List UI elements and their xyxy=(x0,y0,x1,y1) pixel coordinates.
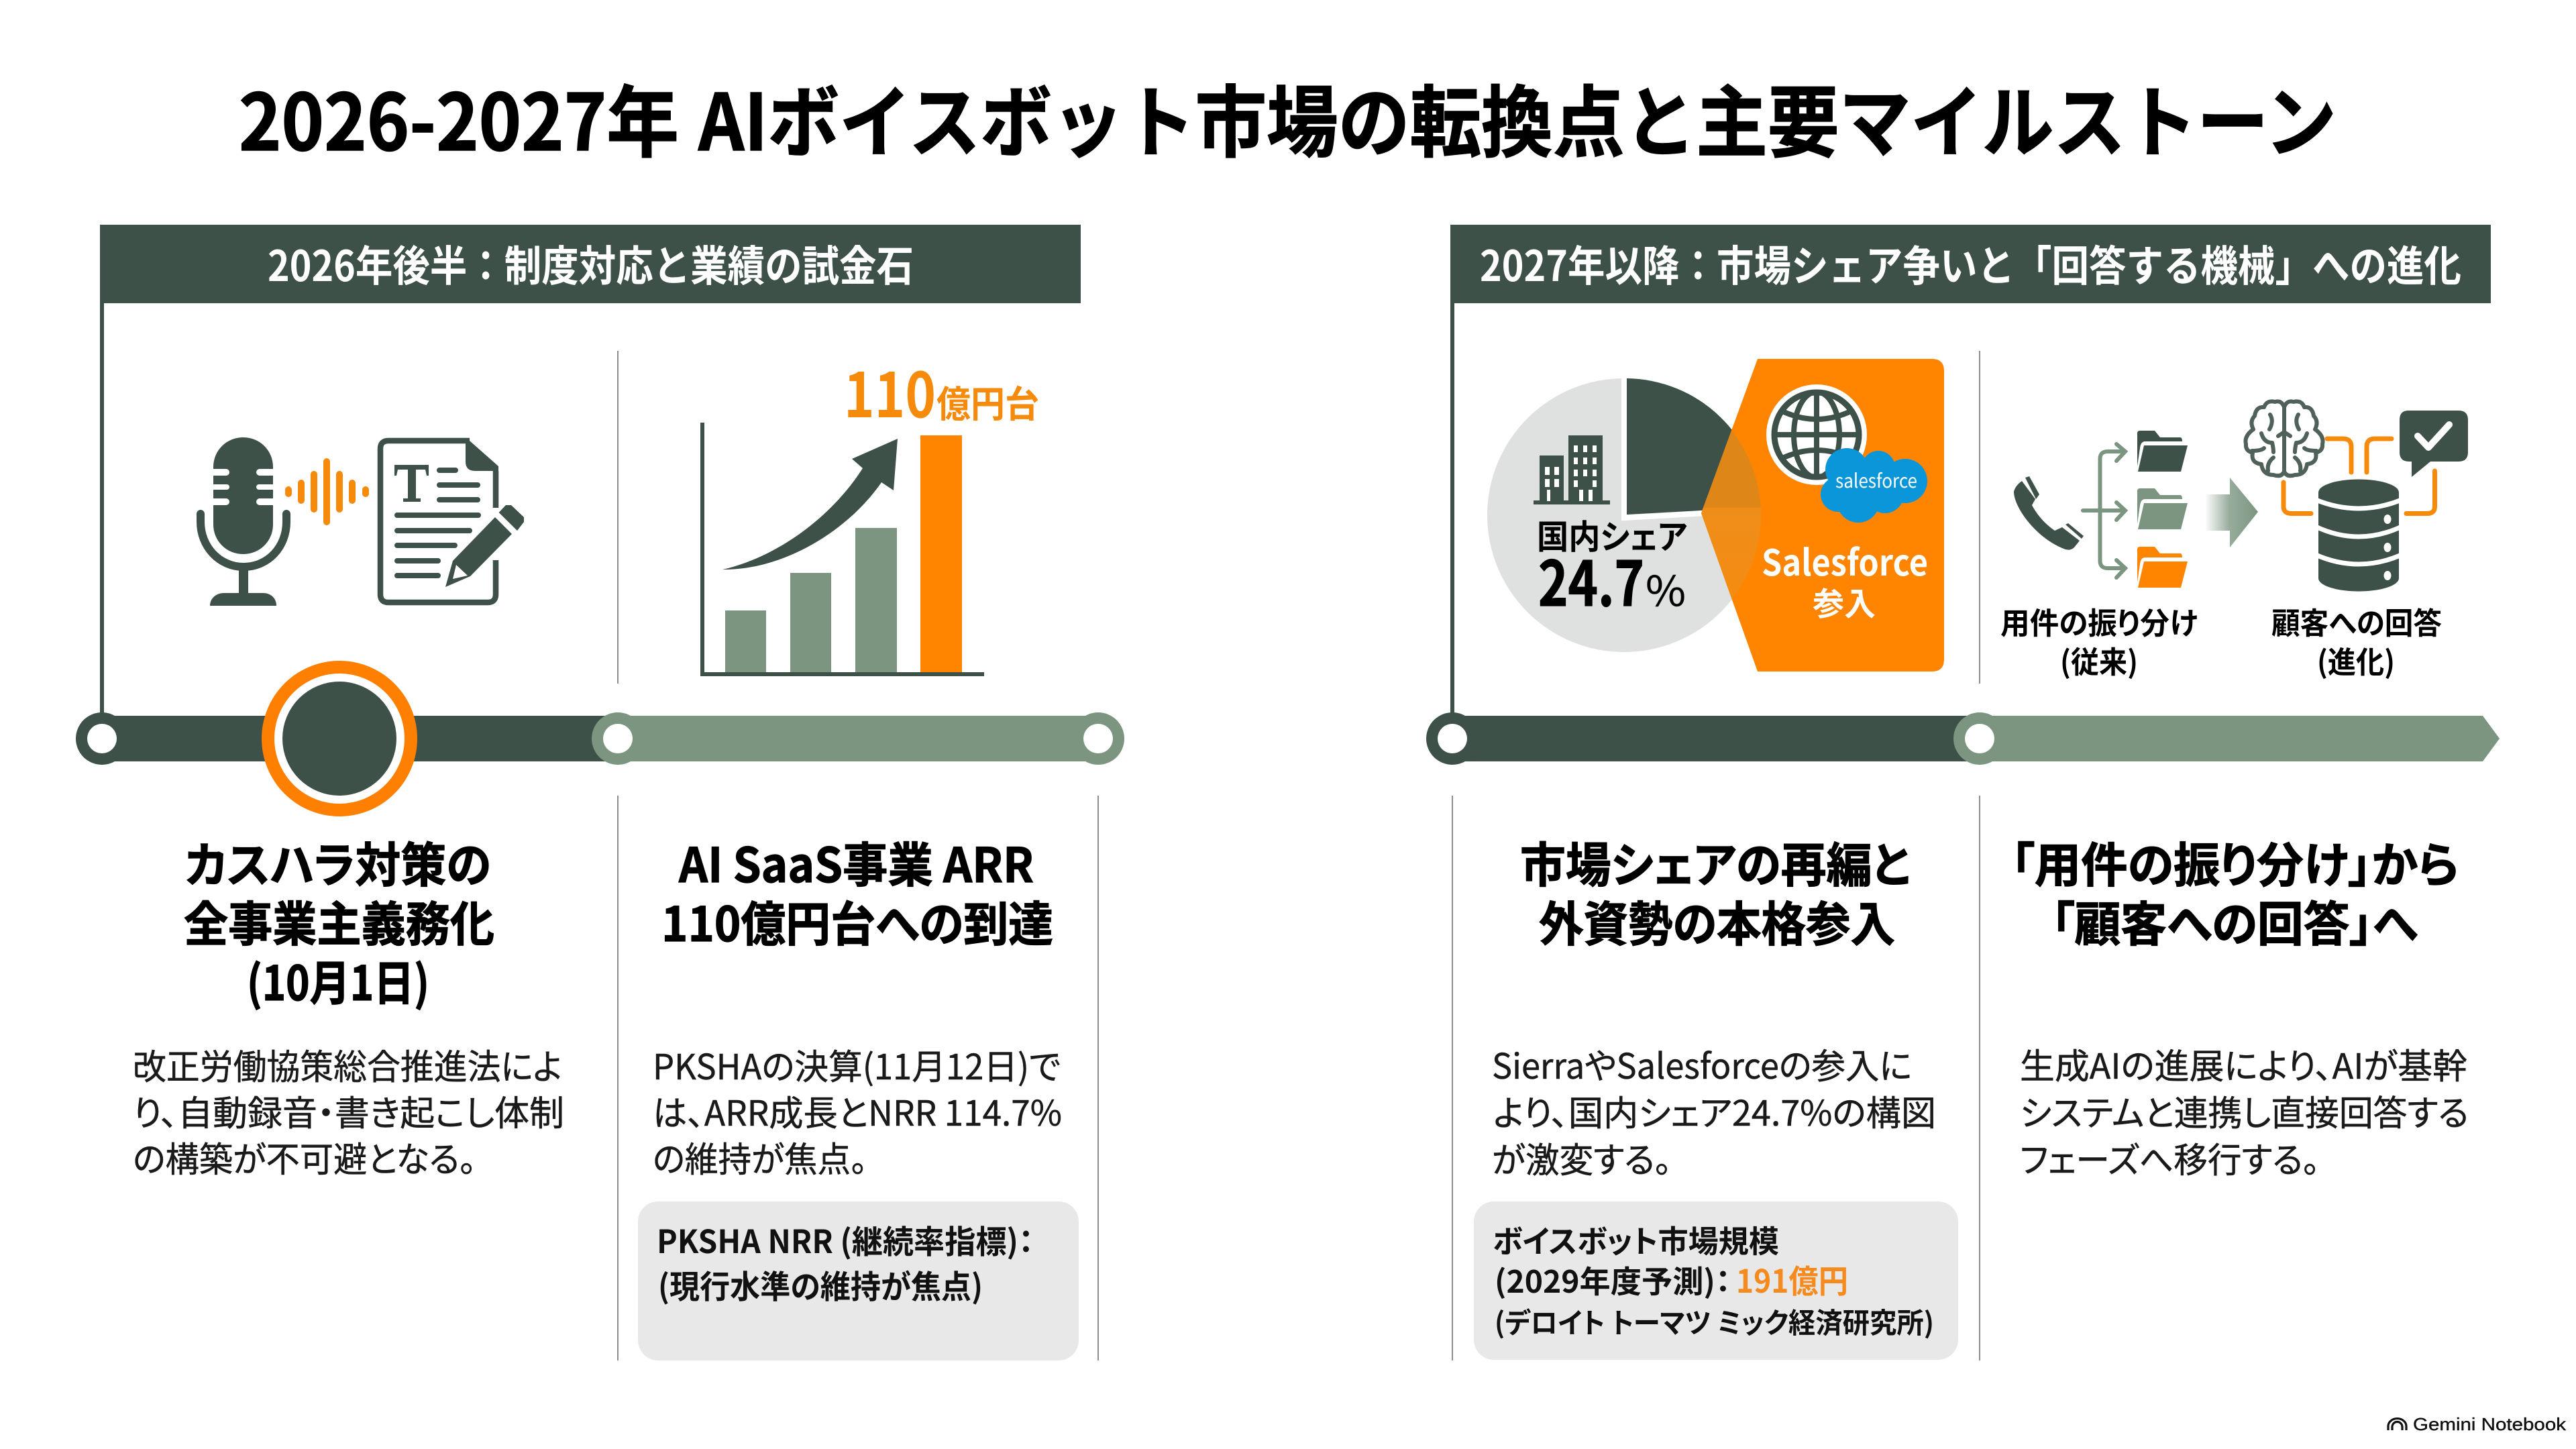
icon: microphone xyxy=(201,437,286,606)
body text: り、自動録音・書き起こし体制 xyxy=(133,1085,564,1136)
diagram: call routing (conventional) xyxy=(2000,431,2198,682)
callout: market size: (デロイト トーマツ ミック経済研究所) xyxy=(1495,1301,1934,1342)
routing label xyxy=(2000,599,2198,682)
milestone text: ARR xyxy=(638,828,1079,1360)
body text: フェーズへ移行する。 xyxy=(2020,1132,2320,1183)
heading: 「顧客への回答」へ xyxy=(2051,887,2418,955)
routing label: (従来) xyxy=(2060,638,2138,682)
panel: 2027 onward xyxy=(1426,225,2500,1360)
heading xyxy=(2011,828,2459,955)
body text: PKSHAの決算(11月12日)で xyxy=(653,1039,1061,1089)
chart value label xyxy=(844,346,1039,435)
body text xyxy=(653,1039,1062,1182)
timeline bar: 2026 xyxy=(76,712,1124,765)
heading: (10月1日) xyxy=(247,946,429,1014)
panel bracket line xyxy=(100,303,104,719)
milestone text: customer harassment xyxy=(133,828,564,1182)
logo: salesforce cloud xyxy=(1821,448,1927,523)
body text: が激変する。 xyxy=(1492,1132,1672,1183)
panel heading: 2027: 2027年以降：市場シェア争いと「回答する機械」への進化 xyxy=(1480,233,2461,294)
title: 2026-2027年 xyxy=(239,60,679,173)
milestone text: routing to answering xyxy=(2011,828,2469,1183)
answering label: (進化) xyxy=(2317,638,2395,682)
callout: PKSHA NRR xyxy=(638,1201,1079,1360)
callout: market size: (2029年度予測)： xyxy=(1495,1258,1731,1302)
icon: database xyxy=(2316,479,2402,592)
callout: market size: 191億円 xyxy=(1736,1255,1848,1302)
diagram: customer answering (evolved) xyxy=(2245,401,2468,682)
heading xyxy=(661,828,1053,955)
body text: SierraやSalesforceの参入に xyxy=(1492,1038,1912,1089)
icon: sound wave xyxy=(288,462,366,522)
callout: PKSHA NRR: (現行水準の維持が焦点) xyxy=(658,1260,983,1307)
icon: office buildings xyxy=(1534,435,1610,504)
heading xyxy=(184,828,494,1014)
heading: 「用件の振り分け」から xyxy=(2011,828,2459,896)
panel heading: 2026: 2026年後半：制度対応と業績の試金石 xyxy=(268,233,914,294)
icon: folders xyxy=(2137,431,2188,588)
pie label: domestic share: 国内シェア xyxy=(1537,511,1687,559)
column dividers xyxy=(617,351,1099,1360)
pie label: domestic share: % xyxy=(1646,557,1686,618)
body text: より、国内シェア24.7%の構図 xyxy=(1493,1085,1936,1136)
callout: market size xyxy=(1474,1201,1958,1360)
body text xyxy=(1492,1038,1936,1183)
column dividers xyxy=(1452,351,1980,1360)
arrow: evolution xyxy=(2206,478,2258,547)
icon: brain xyxy=(2245,401,2323,476)
salesforce label: Salesforce xyxy=(1762,533,1928,586)
body text: の維持が焦点。 xyxy=(653,1132,867,1182)
pie label: domestic share xyxy=(1537,511,1687,624)
timeline arrow bar: 2027 xyxy=(1426,712,2500,765)
bar chart: ARR growth xyxy=(702,346,1039,674)
routing arrows xyxy=(2083,444,2125,578)
heading: 110億円台への到達 xyxy=(661,887,1053,955)
body text: 生成AIの進展により、AIが基幹 xyxy=(2020,1038,2467,1089)
pie chart: domestic share xyxy=(1487,377,1764,652)
logo: salesforce cloud: salesforce xyxy=(1835,466,1917,494)
chart value label: 億円台 xyxy=(936,374,1039,428)
routing label: 用件の振り分け xyxy=(2000,599,2198,643)
heading: 全事業主義務化 xyxy=(184,887,494,955)
panel: 2026 second half xyxy=(76,225,1124,1360)
body text: は、ARR成長とNRR 114.7% xyxy=(653,1085,1062,1136)
body text xyxy=(133,1039,564,1182)
icon: transcript document with pencil xyxy=(380,441,524,602)
serif T glyph shape xyxy=(394,465,429,502)
icon: telephone xyxy=(2014,476,2084,550)
heading: 外資勢の本格参入 xyxy=(1539,887,1895,955)
title: AIボイスボット市場の転換点と主要マイルストーン xyxy=(698,60,2337,173)
credit: Gemini Notebook: Gemini Notebook xyxy=(2413,1414,2567,1434)
body text xyxy=(2020,1038,2469,1183)
growth arrow xyxy=(722,439,898,570)
callout: market size: ボイスボット市場規模 xyxy=(1493,1218,1779,1262)
timeline milestone marker xyxy=(262,661,417,816)
heading: AI SaaS事業 ARR xyxy=(678,828,1034,896)
icon: globe xyxy=(1766,384,1867,485)
chart value label: 110 xyxy=(844,346,936,435)
panel bracket line xyxy=(1450,303,1454,719)
callout: PKSHA NRR: PKSHA NRR (継続率指標)： xyxy=(657,1216,1034,1263)
pie label: domestic share: 24.7 xyxy=(1538,535,1644,624)
icon: speech bubble with check xyxy=(2400,411,2468,477)
milestone text: market share xyxy=(1474,828,1958,1360)
chart bars xyxy=(725,435,962,672)
answering label xyxy=(2271,599,2442,682)
chart axes xyxy=(702,423,984,674)
connector lines xyxy=(2284,439,2435,514)
answering label: 顧客への回答 xyxy=(2271,599,2442,643)
heading: 市場シェアの再編と xyxy=(1520,828,1910,896)
body text: システムと連携し直接回答する xyxy=(2020,1085,2469,1136)
salesforce entry block xyxy=(1701,359,1944,672)
salesforce label: 参入 xyxy=(1813,578,1876,625)
salesforce label xyxy=(1762,533,1928,625)
heading xyxy=(1520,828,1910,955)
body text: の構築が不可避となる。 xyxy=(133,1132,476,1182)
body text: 改正労働協策総合推進法によ xyxy=(133,1039,562,1089)
heading: カスハラ対策の xyxy=(185,828,491,896)
panel heading: 2026 xyxy=(100,225,1081,303)
